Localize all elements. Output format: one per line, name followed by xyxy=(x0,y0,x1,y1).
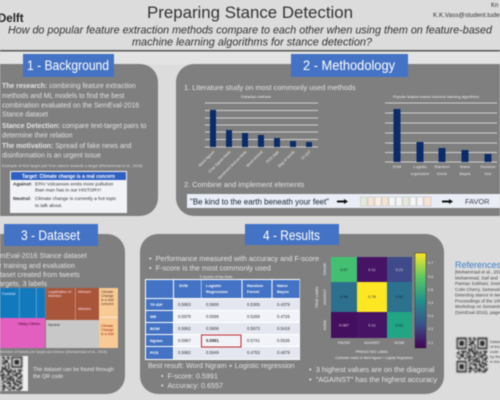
confusion matrix heatmap: 0.40 xyxy=(340,294,349,299)
treemap: Legalization of xyxy=(48,290,71,294)
pipeline example xyxy=(187,194,500,208)
results table: 0.5741 xyxy=(247,338,260,343)
best result text: • F-score: 0.5991 xyxy=(161,372,218,380)
confusion matrix heatmap: NONE xyxy=(394,341,405,345)
treemap: Feminist xyxy=(2,292,16,296)
confusion matrix heatmap: 0.21 xyxy=(396,267,404,272)
results table: 0.4379 xyxy=(277,302,290,307)
stance example table: Neutral: xyxy=(13,196,32,202)
confusion matrix heatmap: TRUE LABEL xyxy=(315,286,319,308)
research question: machine learning algorithms for stance detection? xyxy=(132,36,372,48)
results table: 0.4679 xyxy=(277,350,290,355)
treemap: is a real xyxy=(101,332,114,336)
step 2 text: 2. Combine and implement elements xyxy=(184,180,305,189)
results table: 0.4726 xyxy=(277,314,290,319)
bar chart: feature extraction methods: POS tags xyxy=(265,150,280,164)
stance example table: EPA! Volcanoes emits more pollution xyxy=(35,182,114,188)
bar chart: machine learning algorithms: Random xyxy=(434,164,450,169)
heading: 4 - Results: 4 - Results xyxy=(263,227,320,243)
stance example table: Climate change is currently a hot topic xyxy=(35,196,117,202)
treemap caption: Number of tweets per target and stance (Mohammad et al., 2016) xyxy=(0,350,107,354)
results table: 0.5269 xyxy=(247,314,260,319)
background text: Example of text-target pair from stance towards a target (Mohammad et al., 2016) xyxy=(2,163,143,168)
confusion matrix heatmap: 0.087 xyxy=(339,322,350,328)
title: Preparing Stance Detection xyxy=(147,4,353,22)
confusion matrix heatmap: 0.78 xyxy=(368,294,377,299)
QR caption: code xyxy=(490,349,498,354)
results table: 0.5600 xyxy=(206,302,219,307)
results bullets: • F-score is the most commonly used xyxy=(149,264,271,272)
results table: WE xyxy=(150,314,157,319)
background text: The research: combining feature extraction xyxy=(2,83,136,90)
results table: 0.5649 xyxy=(206,350,219,355)
confusion matrix heatmap: AGAINST xyxy=(364,341,381,345)
heading: 3 - Dataset xyxy=(4,224,98,246)
confusion matrix heatmap: FAVOR xyxy=(338,341,350,345)
results table: 0.5962 xyxy=(178,326,191,331)
confusion matrix notes: • 3 highest values are on the diagonal xyxy=(309,365,435,374)
author: Kn xyxy=(491,3,498,9)
stance example table: than man has in our HISTORY! xyxy=(35,188,101,194)
bar chart: feature extraction methods: Word embed xyxy=(246,150,264,168)
colour bar xyxy=(415,253,433,348)
confusion matrix heatmap: 0.61 xyxy=(396,322,404,328)
bar chart: machine learning algorithms: regression xyxy=(411,171,429,176)
QR caption: of the xyxy=(490,344,500,349)
bar chart: machine learning algorithms: Naive xyxy=(460,164,471,169)
confusion matrix notes: • "AGAINST" has the highest accuracy xyxy=(309,375,437,384)
confusion matrix heatmap: AGAINST xyxy=(323,288,327,305)
bar chart: feature extraction methods: TF-IDF xyxy=(300,149,312,161)
background text: The motivation: Spread of fake news and xyxy=(2,143,132,150)
author xyxy=(433,3,500,19)
heading: 1 - Background: 1 - Background xyxy=(27,57,109,73)
bar chart: machine learning algorithms: forest xyxy=(437,171,448,176)
results table: Naive xyxy=(277,283,288,288)
results table: Logistic xyxy=(206,283,222,288)
stance example table: to talk about. xyxy=(35,203,62,209)
treemap: Atheism xyxy=(78,307,91,311)
colour bar: 0.4 xyxy=(428,301,433,305)
results bullets xyxy=(149,254,319,272)
results table: 0.5991 xyxy=(206,338,219,343)
treemap: Hillary Clinton xyxy=(18,322,40,326)
confusion matrix heatmap: NONE xyxy=(323,319,327,330)
results table: Ngram xyxy=(150,338,163,343)
bar chart: feature extraction methods: Char Ngram feats xyxy=(208,150,232,174)
references text xyxy=(455,270,500,315)
heading: 2 - Methodology: 2 - Methodology xyxy=(303,57,395,73)
background text: methods and ML models to find the best xyxy=(2,93,124,100)
results table: Bayes xyxy=(277,289,290,294)
results table: Forest xyxy=(247,289,260,294)
best result text xyxy=(148,361,295,390)
bar chart: feature extraction methods xyxy=(198,95,318,180)
panel: methodology xyxy=(176,54,500,216)
panel: background xyxy=(0,54,158,216)
results table: SVM xyxy=(179,283,188,288)
results table: 0.5305 xyxy=(247,302,260,307)
results table: 0.5596 xyxy=(206,314,219,319)
treemap: Atheism xyxy=(78,290,91,294)
bar chart: machine learning algorithms: Bayes xyxy=(459,171,471,176)
bar chart: machine learning algorithms xyxy=(385,95,497,176)
bar chart: feature extraction methods: Bag of words xyxy=(277,150,296,168)
results table: Regression xyxy=(206,289,228,294)
best result text: Best result: Word Ngram + Logistic regression xyxy=(148,361,295,370)
background text: disinformation is an urgent issue xyxy=(2,152,101,160)
stance example table xyxy=(10,171,127,213)
background text: combination evaluated on the SemEval-2016 xyxy=(2,102,139,110)
confusion matrix notes xyxy=(309,365,437,384)
background text: determine their relation xyxy=(2,132,73,140)
treemap: Neutral xyxy=(48,323,60,327)
table caption: F-scores of the tests xyxy=(200,275,232,279)
stance example table: Target: Climate change is a real concern xyxy=(22,174,115,180)
results table: 0.5536 xyxy=(277,338,290,343)
pipeline example: "Be kind to the earth beneath your feet" xyxy=(190,198,329,206)
references text: Mohammad, Saif and xyxy=(455,276,498,280)
confusion matrix heatmap: 0.11 xyxy=(368,322,377,328)
QR caption: The dataset can be found through xyxy=(33,367,114,373)
pipeline example: FAVOR xyxy=(465,197,490,206)
bar chart: feature extraction methods: Extraction methods xyxy=(241,95,271,99)
confusion matrix heatmap: Confusion matrix of Word Ngram + Logistic Regression xyxy=(335,356,413,360)
bar chart: machine learning algorithms: Popular feature-based machine learning algorithms xyxy=(393,95,479,99)
QR caption: in the xyxy=(490,359,500,364)
colour bar: 0.1 xyxy=(428,341,433,345)
results table: 0.5673 xyxy=(247,326,260,331)
QR caption xyxy=(490,339,500,364)
confusion matrix heatmap: 0.41 xyxy=(396,294,404,299)
results table: Random xyxy=(247,283,263,288)
colour bar: 0.5 xyxy=(428,288,433,292)
research question: How do popular feature extraction methods compare to each other when using them on feature-based xyxy=(8,24,493,36)
results table: POS xyxy=(150,350,159,355)
confusion matrix heatmap: 0.11 xyxy=(368,267,377,272)
results table: 0.5982 xyxy=(178,350,191,355)
QR caption xyxy=(33,367,114,380)
stance example table: Against: xyxy=(13,182,33,188)
results table: 0.5978 xyxy=(178,314,191,319)
results table: BOW xyxy=(150,326,160,331)
bar chart: machine learning algorithms: tree xyxy=(485,171,492,176)
confusion matrix heatmap xyxy=(315,257,413,360)
treemap: Climate xyxy=(101,324,113,328)
colour bar: 0.6 xyxy=(428,275,433,279)
treemap: Abortion xyxy=(48,294,61,298)
heading: 4 - Results xyxy=(245,224,339,245)
bar chart: feature extraction methods: Sentiment lexicon feats xyxy=(217,150,248,180)
treemap xyxy=(0,288,118,348)
colour bar: 0.2 xyxy=(428,327,433,331)
background text: Stance dataset xyxy=(2,112,48,118)
results table: 0.5606 xyxy=(206,326,219,331)
best result text: • Accuracy: 0.6557 xyxy=(161,381,223,390)
QR code: references xyxy=(456,337,488,373)
bar chart: machine learning algorithms: Decision xyxy=(480,164,496,169)
bar chart: machine learning algorithms: SVM xyxy=(393,164,401,169)
references heading: References xyxy=(455,260,500,270)
treemap: concern xyxy=(101,302,114,306)
heading: 2 - Methodology xyxy=(291,54,408,77)
confusion matrix heatmap: PREDICTED LABEL xyxy=(356,350,388,354)
step 1 text: 1. Literature study on most commonly used methods xyxy=(184,83,356,92)
results bullets: • Performance measured with accuracy and F-score xyxy=(149,254,319,263)
treemap: is a real xyxy=(101,298,114,302)
treemap: Climate xyxy=(101,290,113,294)
colour bar: 0.3 xyxy=(428,314,433,318)
heading: 3 - Dataset: 3 - Dataset xyxy=(21,227,80,243)
colour bar: 0.7 xyxy=(428,261,433,265)
treemap: Change xyxy=(101,294,114,298)
results table: 0.5863 xyxy=(178,302,191,307)
references xyxy=(455,260,500,373)
research question xyxy=(8,24,493,48)
results table: 0.5418 xyxy=(277,326,290,331)
treemap: Change xyxy=(101,328,114,332)
background text: Stance Detection: compare text-target pairs to xyxy=(2,123,147,130)
bar chart: machine learning algorithms: Logistic xyxy=(413,164,427,169)
results table: 0.5967 xyxy=(178,338,191,343)
confusion matrix heatmap: FAVOR xyxy=(323,263,327,275)
results table: TF-IDF xyxy=(150,302,163,307)
results table: 0.4753 xyxy=(247,350,260,355)
dataset text xyxy=(0,252,87,288)
confusion matrix heatmap: 0.67 xyxy=(340,267,349,272)
QR caption: the QR code xyxy=(33,374,63,380)
background text xyxy=(2,83,147,168)
panel: dataset xyxy=(0,224,125,394)
results table xyxy=(145,279,300,360)
panel: results xyxy=(140,224,444,394)
QR code: dataset xyxy=(0,356,28,391)
heading: 1 - Background xyxy=(23,54,114,77)
bar chart: feature extraction methods: Word Ngram xyxy=(198,150,216,168)
